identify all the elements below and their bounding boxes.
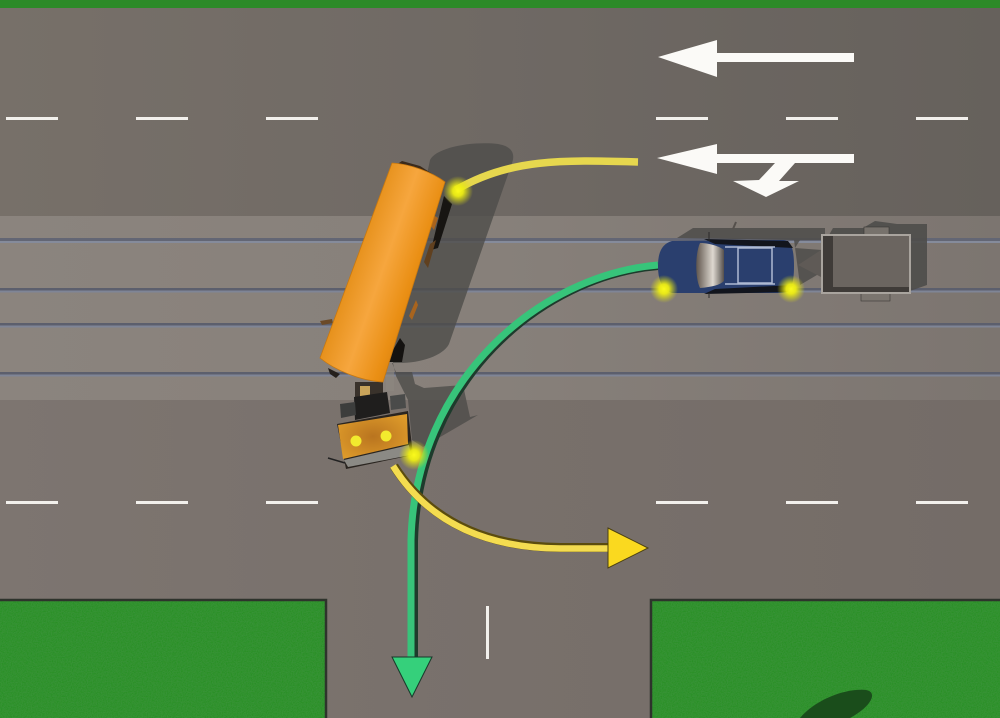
truck — [320, 161, 452, 469]
trailer hitch — [798, 250, 821, 277]
tractor frame — [340, 392, 406, 420]
trailer wheels — [861, 227, 890, 301]
indicator light: truck cab — [399, 440, 429, 470]
yellow path: truck exit — [394, 466, 610, 548]
tanker chassis — [320, 161, 452, 397]
green arrowhead — [392, 657, 432, 697]
lane dashes: lower road — [6, 501, 968, 504]
indicator light: car rear — [777, 275, 805, 303]
lane dashes: upper road — [6, 117, 968, 120]
truck shadow — [390, 143, 513, 447]
tractor cab — [328, 411, 413, 469]
grass: lower left corner — [0, 600, 327, 718]
yellow path: truck upper approach — [456, 161, 638, 190]
road arrow: straight ahead — [658, 40, 854, 77]
car body — [658, 222, 794, 298]
car and trailer — [650, 221, 927, 303]
indicator light: truck rear — [443, 176, 473, 206]
lane dash: side road — [486, 606, 489, 659]
road arrow: straight with lane change — [657, 144, 854, 197]
car shadow — [677, 228, 825, 285]
grass: top strip — [0, 0, 1000, 8]
trailer body — [822, 235, 910, 293]
tanker body — [320, 163, 445, 382]
grass: lower right corner — [650, 600, 1000, 718]
yellow arrowhead — [608, 528, 648, 568]
tram rails — [0, 238, 1000, 376]
indicator light: car front — [650, 275, 678, 303]
green path: turn left from car — [411, 265, 658, 658]
trailer shadow — [829, 221, 927, 291]
